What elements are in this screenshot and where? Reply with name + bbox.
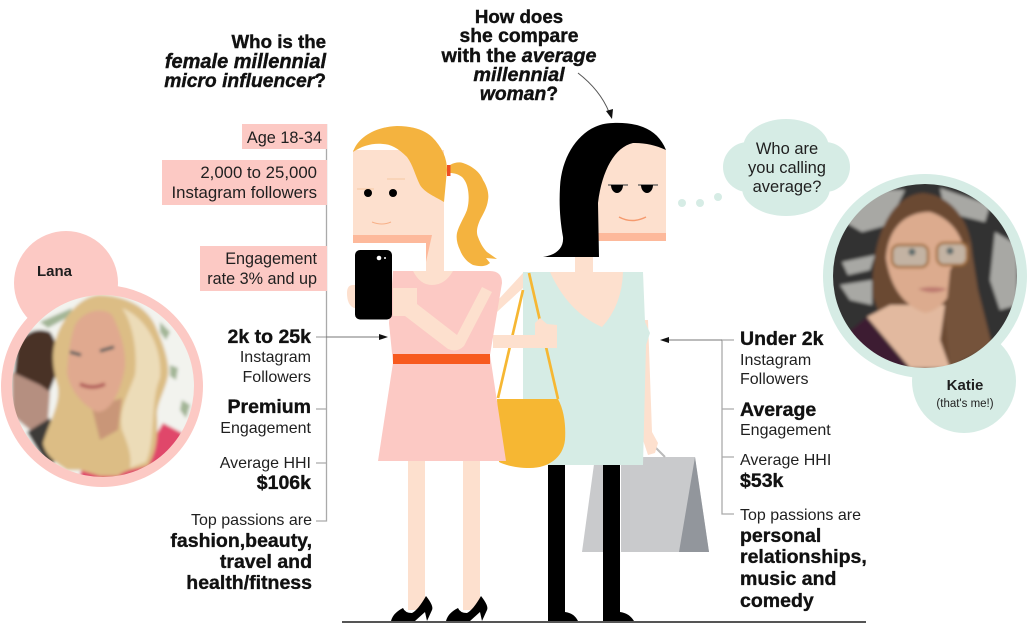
Katie stats: music and — [740, 568, 836, 590]
Katie name bubble and ring: (that's me!) — [936, 398, 994, 410]
Lana stats: Engagement — [220, 420, 312, 437]
Katie stats: comedy — [740, 590, 814, 612]
arrow: to Lana figure — [326, 334, 388, 340]
Lana name bubble and ring — [1, 231, 203, 487]
Katie stats — [740, 328, 867, 612]
far forearm and hand — [493, 318, 557, 348]
thought cloud: Who are — [756, 140, 818, 158]
hand — [347, 285, 362, 308]
figure: average woman — [523, 123, 709, 621]
Lana stats: fashion,beauty, — [170, 530, 312, 552]
heading: how does she compare: she compare — [460, 26, 579, 47]
Lana stats: travel and — [220, 551, 312, 573]
near arm — [393, 287, 492, 350]
Lana stats — [170, 326, 312, 594]
belt — [393, 354, 490, 364]
Lana stats: $106k — [257, 472, 311, 494]
Lana stats: health/fitness — [186, 572, 312, 594]
bag — [497, 399, 565, 468]
arm — [640, 320, 658, 455]
dress — [378, 271, 506, 461]
Katie stats: Top passions are — [740, 507, 861, 524]
Lana stats: Top passions are — [191, 512, 312, 529]
left bracket line — [316, 124, 326, 521]
title: who is the female millennial micro influencer: micro influencer? — [164, 71, 326, 92]
ground line — [342, 621, 866, 623]
Katie stats: personal — [740, 525, 821, 547]
title: who is the female millennial micro influencer — [164, 31, 326, 92]
Katie stats: Under 2k — [740, 328, 824, 350]
definition: followers: Instagram followers — [172, 183, 317, 202]
Katie stats: Followers — [740, 371, 808, 388]
bag straps — [498, 273, 558, 399]
legs — [548, 460, 634, 621]
heading: how does she compare: woman? — [480, 84, 558, 105]
definition: age: Age 18-34 — [247, 129, 322, 147]
Lana stats: Average HHI — [220, 455, 311, 472]
Lana stats: Followers — [243, 369, 311, 386]
Lana name bubble and ring: Lana — [37, 263, 73, 280]
shopping bag — [582, 447, 709, 552]
thought cloud — [723, 119, 850, 216]
heading: how does she compare: with the average — [440, 45, 597, 67]
arrow: to Katie figure — [660, 337, 722, 343]
title: who is the female millennial micro influencer: female millennial — [165, 51, 326, 73]
heading: how does she compare — [440, 6, 597, 105]
phone — [355, 250, 392, 320]
thought cloud: you calling — [748, 159, 826, 177]
Lana stats: Premium — [228, 396, 311, 418]
photo: Katie — [830, 180, 1022, 372]
Katie name bubble and ring: Katie — [947, 377, 983, 394]
definition: engagement: Engagement — [225, 250, 317, 268]
definition: engagement — [200, 246, 327, 291]
hair tie — [447, 165, 450, 176]
Katie stats: Engagement — [740, 422, 831, 439]
photo: Lana — [12, 295, 194, 477]
Katie stats: relationships, — [740, 546, 867, 568]
figure: micro influencer — [347, 126, 565, 621]
face — [597, 143, 666, 241]
arrow: heading to average woman — [578, 73, 613, 119]
title: who is the female millennial micro influencer: Who is the — [232, 31, 326, 52]
definition: age — [242, 124, 327, 149]
right bracket line — [722, 340, 734, 514]
top — [523, 272, 650, 465]
Katie stats: Instagram — [740, 352, 811, 369]
heading: how does she compare: millennial — [473, 64, 565, 86]
Katie stats: Average HHI — [740, 452, 831, 469]
dress neckline — [413, 271, 453, 285]
Katie name bubble and ring — [823, 174, 1027, 433]
definition: followers: 2,000 to 25,000 — [200, 163, 317, 182]
Lana stats: Instagram — [240, 349, 311, 366]
legs — [408, 460, 480, 610]
heading: how does she compare: How does — [475, 6, 563, 27]
Lana stats: 2k to 25k — [228, 326, 311, 348]
thought cloud: average? — [753, 178, 821, 196]
neck — [575, 255, 593, 275]
hair — [543, 123, 666, 257]
neck — [426, 235, 444, 275]
definition: followers — [162, 160, 327, 205]
definition: engagement: rate 3% and up — [207, 270, 317, 288]
far arm — [497, 273, 523, 312]
Katie stats: Average — [740, 399, 816, 421]
ponytail — [450, 162, 497, 266]
thought dots — [678, 193, 722, 207]
heels — [391, 596, 487, 621]
neckline — [550, 272, 623, 327]
Katie stats: $53k — [740, 470, 784, 492]
head — [353, 126, 447, 262]
